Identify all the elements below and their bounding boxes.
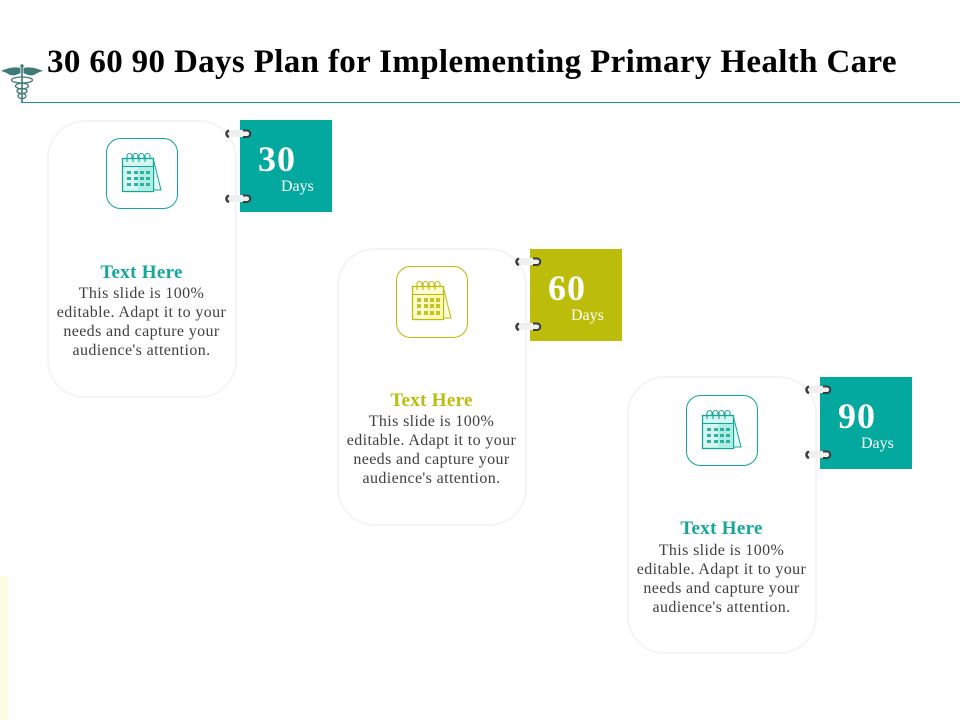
day tag [820, 377, 912, 469]
text block: needs and capture your [643, 580, 800, 597]
heading: Text Here [390, 390, 473, 411]
unit: Days [861, 435, 894, 452]
text block: audience's attention. [653, 599, 790, 616]
ring binder clips [805, 385, 832, 460]
text block: audience's attention. [73, 342, 210, 359]
number: 60 [548, 268, 586, 308]
number: 30 [258, 139, 296, 179]
text block: editable. Adapt it to your [57, 304, 226, 321]
icon: calendar [106, 138, 178, 209]
unit: Days [571, 307, 604, 324]
unit: Days [281, 178, 314, 195]
card [47, 120, 237, 398]
title underline [21, 102, 960, 103]
text block: editable. Adapt it to your [347, 432, 516, 449]
icon: caduceus [1, 64, 43, 102]
title: 30 60 90 Days Plan for Implementing Primary Health Care [47, 44, 897, 80]
card [337, 248, 527, 526]
text block: audience's attention. [363, 470, 500, 487]
panel: 30 days [47, 120, 332, 398]
text block [637, 542, 806, 616]
icon: calendar [396, 266, 468, 338]
text block: This slide is 100% [79, 285, 204, 302]
panel: 60 days [337, 248, 622, 526]
heading: Text Here [680, 518, 763, 539]
decorative strip [0, 576, 8, 720]
text block [57, 285, 226, 359]
text block: needs and capture your [353, 451, 510, 468]
text block: This slide is 100% [659, 542, 784, 559]
card [627, 376, 817, 654]
day tag [530, 249, 622, 341]
panel: 90 days [627, 376, 912, 654]
number: 90 [838, 396, 876, 436]
text block: needs and capture your [63, 323, 220, 340]
text block: This slide is 100% [369, 413, 494, 430]
text block: editable. Adapt it to your [637, 561, 806, 578]
icon: calendar [686, 395, 758, 466]
day tag [240, 120, 332, 212]
ring binder clips [225, 129, 252, 204]
text block [347, 413, 516, 487]
ring binder clips [515, 257, 542, 332]
heading: Text Here [100, 262, 183, 283]
